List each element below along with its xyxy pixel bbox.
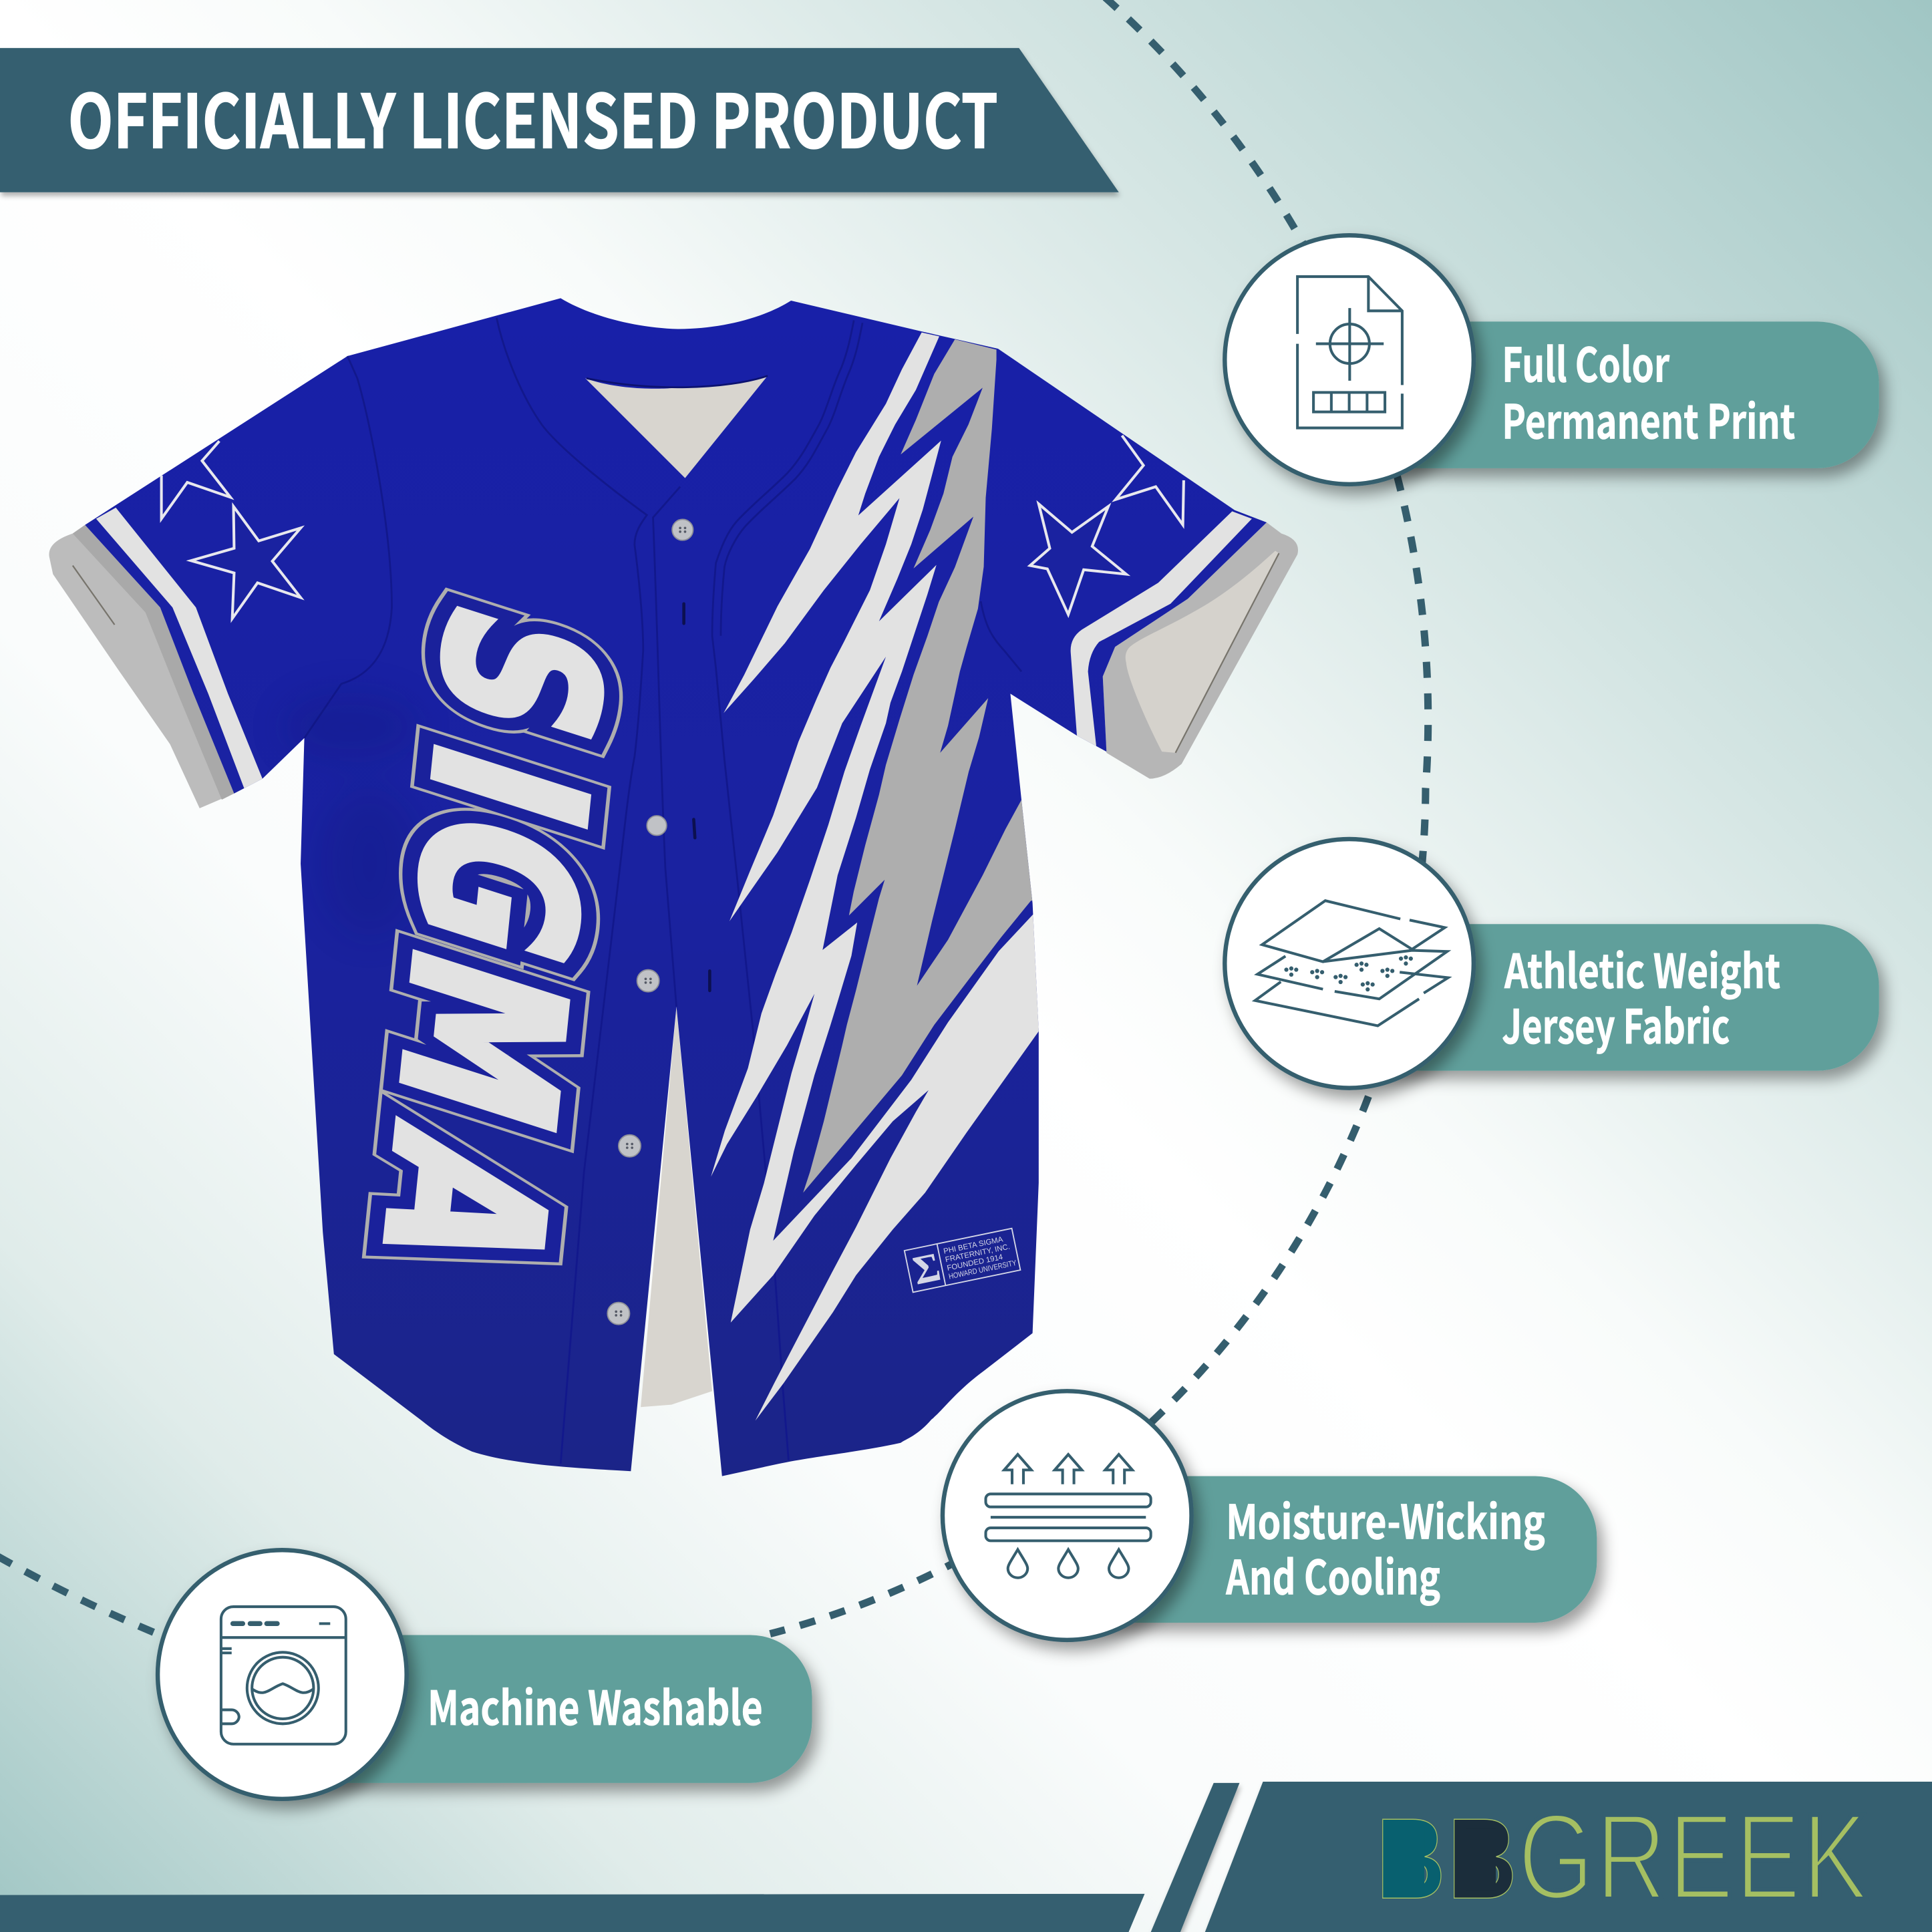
right sleeve cuff: [1103, 522, 1298, 779]
footer slash: [1151, 1783, 1239, 1932]
icon: fabric layers: [1255, 901, 1448, 1025]
circle: [1225, 235, 1474, 484]
feature: machine washable: [158, 1550, 812, 1799]
neck opening: [585, 376, 768, 478]
label: Permanent Print: [1502, 385, 1795, 453]
buttons: [607, 519, 693, 1325]
stars: [162, 436, 1184, 619]
label: [1502, 935, 1780, 1058]
feature: full color permanent print: [1225, 235, 1879, 484]
Sigma label tag: Σ: [909, 1245, 945, 1294]
pill: [1349, 321, 1879, 468]
label: Jersey Fabric: [1502, 990, 1730, 1058]
seams: [305, 318, 1021, 1464]
jersey: [49, 298, 1298, 1476]
label: And Cooling: [1225, 1541, 1440, 1609]
feature: athletic weight jersey fabric: [1225, 839, 1879, 1088]
jersey graphics: [96, 333, 1252, 1421]
left sleeve cuff: [49, 525, 234, 808]
icon: washing machine: [221, 1607, 346, 1744]
gray bolt: [803, 339, 1033, 1192]
pill: [282, 1635, 812, 1783]
circle: [158, 1550, 407, 1799]
Sigma label tag: FRATERNITY, INC.: [945, 1243, 1011, 1264]
pill: [1349, 924, 1879, 1071]
label: Machine Washable: [428, 1671, 763, 1739]
icon: print document: [1297, 277, 1402, 428]
pill: [1067, 1476, 1597, 1623]
footer: [0, 1782, 1932, 1932]
footer panel: [1205, 1782, 1932, 1932]
jersey inner fabric: [641, 1007, 712, 1407]
label: [1225, 1486, 1545, 1609]
circle: [1225, 839, 1474, 1088]
circle: [943, 1391, 1192, 1640]
SIGMA lettering: SIGMA: [337, 579, 643, 1304]
header banner: [0, 48, 1119, 192]
dashed connector arc: [0, 0, 1428, 1635]
Sigma label tag: [905, 1229, 1021, 1295]
label: Moisture-Wicking: [1226, 1486, 1545, 1553]
logo: B: [1448, 1795, 1516, 1923]
label: [1502, 329, 1795, 453]
label: Athletic Weight: [1504, 935, 1780, 1002]
SIGMA lettering: SIGMA: [337, 579, 643, 1304]
Sigma label tag: HOWARD UNIVERSITY: [948, 1259, 1017, 1281]
logo: B: [1376, 1795, 1445, 1923]
feature: moisture-wicking and cooling: [943, 1391, 1597, 1640]
Sigma label tag: PHI BETA SIGMA: [943, 1235, 1004, 1256]
jersey body: [85, 298, 1267, 1476]
fold shading: [301, 702, 402, 917]
sleeve stripes: [96, 508, 1252, 791]
header title: OFFICIALLY LICENSED PRODUCT: [67, 62, 998, 169]
footer bar: [0, 1894, 1144, 1932]
buttonholes: [684, 604, 709, 991]
label: Full Color: [1502, 329, 1669, 396]
logo: GREEK: [1518, 1789, 1869, 1925]
icon: moisture wicking: [986, 1454, 1151, 1578]
Sigma label tag: FOUNDED 1914: [947, 1253, 1004, 1273]
white lightning bolts: [711, 333, 1048, 1421]
SIGMA lettering: SIGMA: [337, 579, 643, 1304]
